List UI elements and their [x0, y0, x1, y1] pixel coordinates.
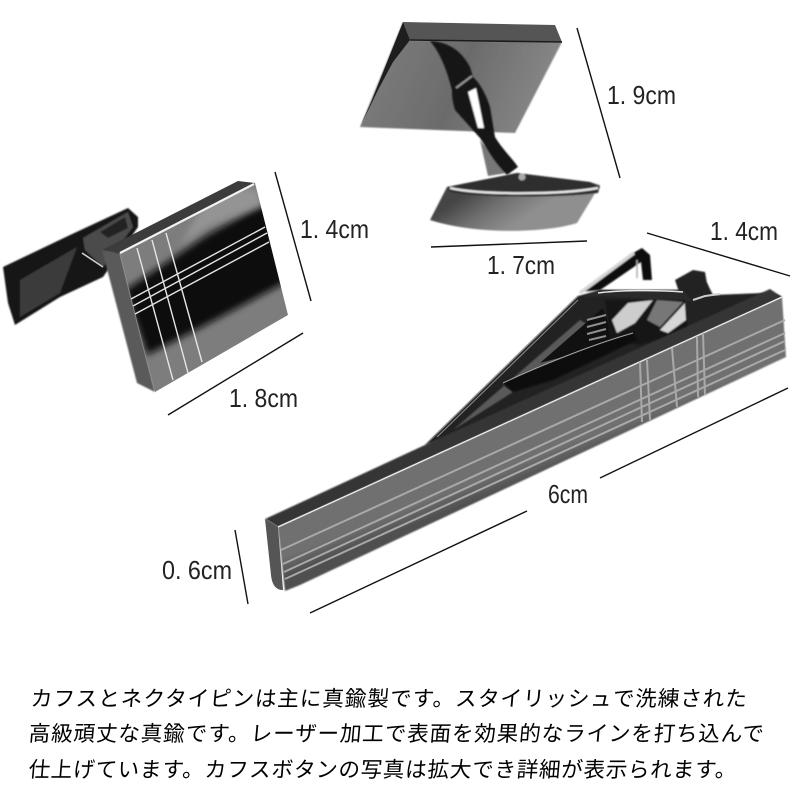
left cufflink: [2, 181, 288, 392]
left edge: [360, 22, 410, 127]
dimension line: 1.7cm: [431, 241, 587, 247]
line 2: 高級頑丈な真鍮です。レーザー加工で表面を効果的なラインを打ち込んで: [28, 722, 765, 746]
label: cufflink 1.4cm: 1. 4cm: [300, 214, 369, 244]
cufflink engraved lines: [131, 227, 269, 380]
dimension line: 6cm right: [600, 388, 788, 478]
clip end cap: [265, 519, 283, 590]
clip top plate: [583, 290, 693, 302]
clip windows: [605, 300, 688, 345]
cufflink stem highlight: [82, 253, 103, 267]
back face: [360, 22, 562, 133]
dimension line: 1.9cm: [577, 28, 620, 178]
clip long thin edge: [428, 296, 578, 442]
stem: [430, 41, 518, 176]
label: 0.6cm: 0. 6cm: [162, 555, 232, 585]
clip engraved lines: [281, 320, 785, 579]
line 3: 仕上げています。カフスボタンの写真は拡大でき詳細が表示られます。: [28, 758, 738, 782]
cufflink face: [120, 183, 288, 392]
dimension line: 1.8cm: [168, 333, 303, 415]
clip spring: [587, 315, 606, 340]
clip white edge: [278, 297, 782, 527]
cufflink back bar: [3, 208, 138, 325]
top rim: [403, 22, 562, 42]
top cufflink: [360, 22, 600, 231]
label: 1.7cm: 1. 7cm: [487, 250, 555, 280]
description text: [28, 687, 765, 782]
dimension line: cufflink 1.4cm: [275, 172, 311, 301]
upper clip triangle base: [425, 283, 782, 445]
label: 1.8cm: 1. 8cm: [229, 383, 298, 413]
dimension line: 6cm left: [310, 511, 527, 613]
tie clip: [265, 248, 786, 591]
label: 6cm: 6cm: [548, 479, 588, 509]
clip top plate highlight: [598, 291, 683, 293]
line 1: カフスとネクタイピンは主に真鍮製です。スタイリッシュで洗練された: [30, 687, 748, 711]
clip top bevel: [265, 289, 782, 527]
cufflink top highlight: [120, 184, 254, 253]
dimension line: tie clip 1.4cm: [647, 233, 790, 276]
label: tie clip 1.4cm: 1. 4cm: [710, 216, 778, 246]
label: 1.9cm: 1. 9cm: [607, 80, 676, 110]
clip inner arm: [503, 333, 637, 392]
cufflink top edge: [102, 181, 255, 253]
clip wedge grey: [453, 320, 610, 430]
cufflink side: [102, 250, 155, 392]
toggle bar: [430, 173, 600, 231]
clip front face: [278, 297, 786, 591]
dimension line: 0.6cm: [235, 530, 248, 604]
clip interior dark: [540, 308, 634, 363]
clip handle: [580, 248, 709, 295]
